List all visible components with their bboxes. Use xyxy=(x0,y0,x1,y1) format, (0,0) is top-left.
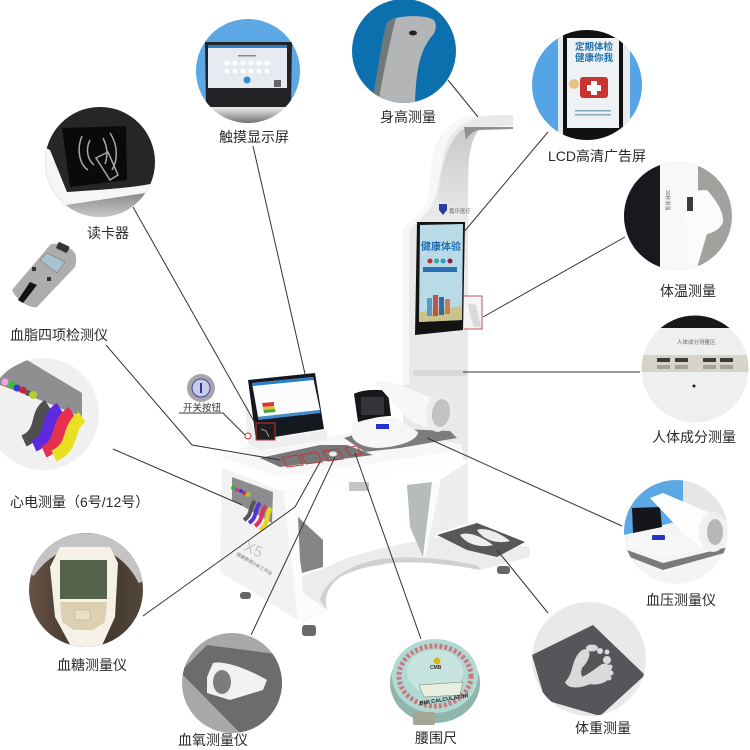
model text: X5 xyxy=(241,538,265,561)
logo: 嘉乐医疗 xyxy=(449,207,472,215)
circle: LCD ad screen: 健康你我 xyxy=(575,52,614,64)
label: LCD: LCD高清广告屏 xyxy=(548,148,646,164)
circle: SpO2 xyxy=(180,630,284,736)
label: temperature: 体温测量 xyxy=(660,283,716,299)
logo xyxy=(439,204,472,215)
circle: LCD ad screen: 定期体检 xyxy=(575,41,614,53)
device name: 健康管理分析工作站 xyxy=(235,551,274,577)
label: glucose: 血糖测量仪 xyxy=(57,657,127,673)
BP device xyxy=(352,381,455,448)
thermometer box xyxy=(464,296,482,329)
circle: glucose xyxy=(27,532,145,650)
reader square xyxy=(256,423,275,440)
label: lipid meter: 血脂四项检测仪 xyxy=(10,327,108,343)
label: waist tape: 腰围尺 xyxy=(415,730,457,746)
power button icon xyxy=(187,374,215,402)
waist tape xyxy=(390,639,480,725)
label: blood pressure: 血压测量仪 xyxy=(646,592,716,608)
label: ECG: 心电测量（6号/12号） xyxy=(10,494,149,510)
circle: card reader xyxy=(45,107,155,217)
lipid meter xyxy=(12,242,76,307)
grey inlay pad xyxy=(260,445,373,467)
circle: body composition xyxy=(640,315,750,425)
front leg xyxy=(283,486,327,622)
label: power button: 开关按钮 xyxy=(183,402,222,414)
circle: temperature: 30秒测温 xyxy=(664,190,671,211)
cabinet left face xyxy=(220,465,298,620)
circle: touch display xyxy=(196,19,300,123)
circle: body composition: 人体成分测量区 xyxy=(677,338,716,346)
circle: LCD ad screen xyxy=(530,28,645,142)
ECG cable panel xyxy=(231,477,273,530)
label: touch display: 触摸显示屏 xyxy=(219,129,289,145)
waist tape: CMB xyxy=(430,665,442,671)
machine: table xyxy=(220,373,468,622)
touch display on table xyxy=(245,373,327,450)
grey drawer xyxy=(298,517,323,573)
circle: weight xyxy=(530,600,648,718)
waist tape: BMI CALCULATOR xyxy=(419,693,469,707)
blood pressure pad xyxy=(344,428,457,452)
LCD screen: 健康体验 xyxy=(421,240,461,253)
body composition bar xyxy=(413,370,468,376)
support pillar xyxy=(407,462,468,557)
circle: blood pressure xyxy=(624,480,728,584)
scale pad xyxy=(437,523,525,557)
label: body composition: 人体成分测量 xyxy=(652,429,736,445)
leader lines xyxy=(106,80,640,639)
circle: ECG xyxy=(0,356,101,472)
table top xyxy=(222,428,462,492)
label: card reader: 读卡器 xyxy=(87,225,129,241)
machine: base and scale xyxy=(240,523,530,636)
label: weight: 体重测量 xyxy=(575,720,631,736)
LCD screen xyxy=(415,222,465,335)
label: height: 身高测量 xyxy=(380,109,436,125)
circle: height sensor xyxy=(352,0,456,104)
machine: height column xyxy=(403,115,513,460)
circle: temperature xyxy=(624,162,734,270)
label: SpO2: 血氧测量仪 xyxy=(178,732,248,748)
